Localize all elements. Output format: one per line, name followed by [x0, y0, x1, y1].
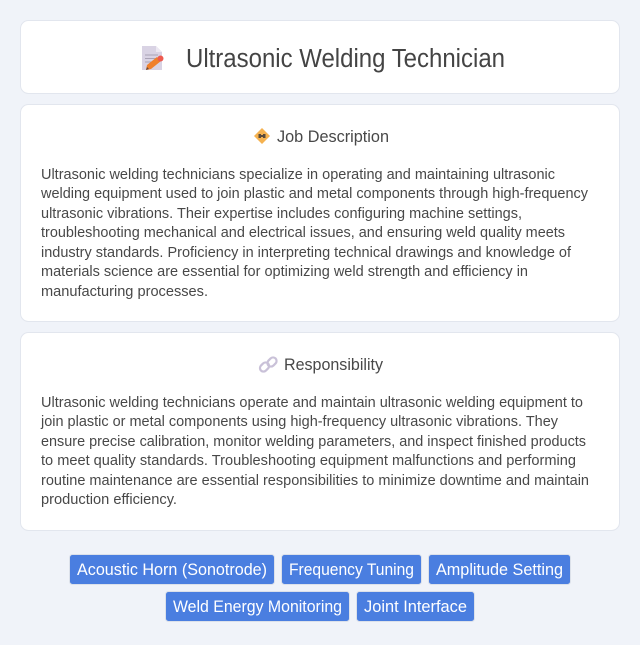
text block: responsibility: to meet quality standards. Troubleshooting equipment malfunctions and performing — [41, 453, 576, 469]
text block: responsibility: join plastic or metal components using high-frequency ultrasonic vibrations. They — [40, 414, 559, 430]
text block: responsibility: Ultrasonic welding technicians operate and maintain ultrasonic welding equipment to — [41, 395, 583, 411]
text block: responsibility: ensure precise calibration, monitor welding parameters, and inspect finished products — [41, 434, 586, 450]
heading: job description: Job Description — [277, 128, 389, 146]
tag: weld energy monitoring: Weld Energy Monitoring — [173, 598, 342, 616]
text block: job description: materials science are essential for optimizing weld strength and efficiency in — [41, 264, 528, 280]
tag: acoustic horn — [70, 554, 274, 584]
tag: amplitude setting — [428, 554, 570, 584]
text block: job description: manufacturing processes. — [41, 284, 208, 300]
tag: frequency tuning: Frequency Tuning — [289, 561, 414, 579]
panel: job description — [20, 104, 620, 322]
tag: acoustic horn: Acoustic Horn (Sonotrode) — [77, 561, 267, 579]
text block: job description: Ultrasonic welding technicians specialize in operating and maintaining ultrasonic — [41, 167, 555, 183]
icon: document with pencil — [142, 46, 164, 70]
panel: title — [20, 20, 620, 94]
text block: job description — [40, 167, 589, 300]
heading: responsibility: Responsibility — [284, 356, 384, 374]
text block: responsibility — [40, 395, 589, 508]
tag: joint interface: Joint Interface — [364, 598, 467, 616]
text block: responsibility: routine maintenance are essential responsibilities to minimize downtime and maintain — [41, 473, 589, 489]
title text: Ultrasonic Welding Technician — [186, 45, 505, 73]
text block: job description: troubleshooting mechanical and electrical issues, and ensuring weld quality meets — [41, 225, 565, 241]
icon: diamond sign — [254, 128, 270, 144]
icon: chain link — [258, 356, 278, 373]
text block: job description: industry standards. Proficiency in interpreting technical drawings and knowledge of — [41, 245, 572, 261]
tag: joint interface — [356, 592, 474, 622]
tag: amplitude setting: Amplitude Setting — [436, 561, 563, 579]
text block: responsibility: production efficiency. — [41, 492, 177, 508]
text block: job description: ultrasonic vibrations. Their expertise includes configuring machine settings, — [41, 206, 522, 222]
tag: weld energy monitoring — [166, 592, 350, 622]
panel: responsibility — [20, 332, 620, 530]
tag: frequency tuning — [282, 554, 422, 584]
text block: job description: welding equipment used to join plastic and metal components through high-frequency — [40, 186, 589, 202]
